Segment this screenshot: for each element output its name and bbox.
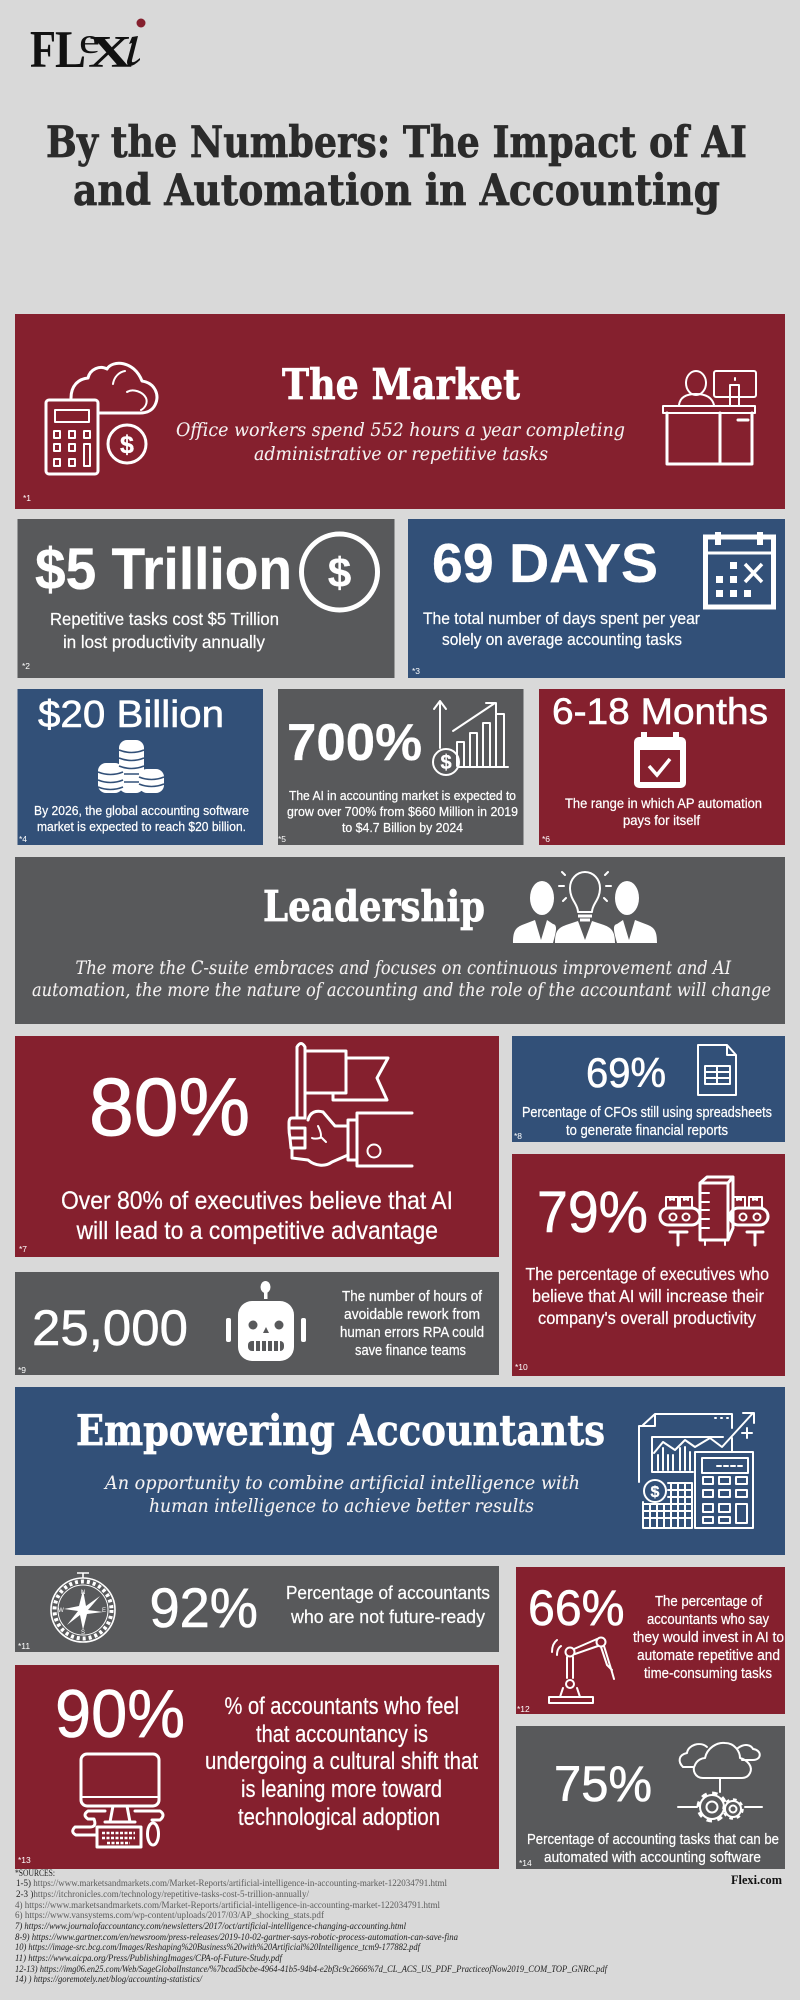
logo: Flexi [30,18,146,79]
description: automate repetitive and [637,1648,780,1664]
icon: production line [660,1177,768,1245]
panel: 90% [15,1665,499,1869]
heading: Empowering Accountants [76,1406,605,1455]
description [287,789,518,835]
sources list: 14) ) https://goremotely.net/blog/accounting-statistics/ [15,1974,203,1985]
description: The range in which AP automation [565,796,762,811]
logo: Flexi: e [79,21,100,61]
subtitle: human intelligence to achieve better results [149,1495,534,1517]
panel: 66% [516,1567,785,1714]
icon: calendar [705,532,774,607]
panel: the market [15,314,785,509]
icon: compass: E [102,1608,106,1614]
icon: compass: S [81,1630,85,1636]
sources list [15,1869,608,1985]
icon: desktop computer [73,1754,163,1847]
icon: report and calculator: $ [651,1484,660,1501]
description: The AI in accounting market is expected to [289,789,516,803]
sources list: 7) https://www.journalofaccountancy.com/newsletters/2017/oct/artificial-intelligence-changing-accounting.html [15,1921,406,1932]
description: accountants who say [647,1612,770,1628]
footnote: *2 [22,661,30,671]
description: company's overall productivity [538,1308,756,1328]
stat: 66% [528,1580,624,1636]
icon: compass [51,1573,115,1642]
footnote: *10 [515,1362,528,1372]
icon: fist holding flag [289,1044,412,1166]
description: pays for itself [623,813,700,828]
subtitle: administrative or repetitive tasks [254,443,548,465]
panel: 700% [278,689,524,845]
title [46,118,747,216]
description: to $4.7 Billion by 2024 [342,821,463,835]
sources list: 2-3 )https://itchronicles.com/technology/repetitive-tasks-cost-5-trillion-annually/ [16,1889,309,1900]
footnote: *11 [18,1641,30,1651]
sources list: 6) https://www.vansystems.com/wp-content/uploads/2017/03/AP_shocking_stats.pdf [15,1910,325,1921]
subtitle: An opportunity to combine artificial intelligence with [103,1472,580,1494]
icon: growth chart: $ [440,752,452,774]
description: avoidable rework from [344,1307,480,1323]
footnote: *8 [514,1131,522,1141]
heading: The Market [282,360,521,409]
description [340,1289,484,1359]
stat: 92% [150,1576,258,1639]
description: Percentage of accountants [286,1583,490,1603]
footnote: *14 [519,1858,532,1868]
icon: spreadsheet [698,1045,736,1095]
icon: three leaders and bulb [513,872,657,943]
footnote: *6 [542,834,550,844]
subtitle [103,1472,580,1517]
description: Over 80% of executives believe that AI [61,1187,453,1215]
description: save finance teams [355,1343,466,1359]
subtitle: Office workers spend 552 hours a year completing [176,419,625,441]
description: The percentage of executives who [526,1264,769,1284]
panel: leadership [15,857,785,1024]
description [423,609,700,649]
footnote: *13 [18,1855,31,1865]
description: undergoing a cultural shift that [205,1748,478,1775]
footnote: *12 [517,1704,530,1714]
footnote: *9 [18,1365,26,1375]
description: Percentage of accounting tasks that can be [527,1832,779,1848]
description: is leaning more toward [241,1776,442,1803]
footnote: *5 [278,834,286,844]
stat: 80% [89,1062,250,1153]
description: will lead to a competitive advantage [76,1217,438,1245]
description [565,796,762,828]
footnote: *7 [19,1244,27,1254]
icon: robot arm [549,1638,614,1703]
icon: dollar circle [302,534,378,610]
panel: 6-18 months [539,689,785,845]
panel: 75% [516,1726,785,1869]
panel: empowering accountants [15,1387,785,1555]
description [527,1832,779,1866]
sources list: *SOURCES: [15,1869,55,1879]
description: market is expected to reach $20 billion. [37,820,246,834]
description [522,1105,772,1139]
description: to generate financial reports [566,1123,728,1139]
stat: 25,000 [32,1300,188,1356]
icon: calculator, cloud and coin [46,363,157,474]
panel: 79% [512,1154,785,1376]
sources list: 11) https://www.aicpa.org/Press/PublishingImages/CPA-of-Future-Study.pdf [15,1953,283,1964]
panel: $20 billion [18,689,263,845]
panel: 92% [15,1566,499,1652]
icon: report and calculator [639,1413,754,1528]
stat: 700% [287,714,422,772]
stat: 6-18 Months [552,691,768,732]
description: % of accountants who feel [224,1693,459,1720]
description: technological adoption [238,1804,440,1831]
heading: Leadership [263,882,485,931]
description: believe that AI will increase their [532,1286,764,1306]
description: The total number of days spent per year [423,609,700,628]
website credit: Flexi.com [731,1872,782,1887]
description: who are not future-ready [290,1607,485,1627]
stat: 69% [586,1049,666,1096]
sources list: 10) https://image-src.bcg.com/Images/Reshaping%20Business%20with%20Artificial%20Intelligence_tcm9-177882.pdf [15,1942,421,1953]
icon: compass: W [58,1608,64,1614]
footnote: *4 [19,834,27,844]
description: they would invest in AI to [633,1630,784,1646]
description [32,957,771,1001]
description [205,1693,478,1831]
stat: 90% [55,1676,185,1752]
description [50,609,279,652]
description: time-consuming tasks [644,1666,772,1682]
footnote: *1 [23,493,31,503]
description [286,1583,490,1627]
description: The percentage of [655,1594,763,1610]
stat: $5 Trillion [35,537,292,602]
panel: 25,000 [15,1272,499,1375]
logo: Flexi: F [30,21,56,79]
panel: 69% [512,1036,785,1142]
description: human errors RPA could [340,1325,484,1341]
description [34,804,249,834]
icon: growth chart [433,701,508,775]
sources list: 8-9) https://www.gartner.com/en/newsroom/press-releases/2019-10-02-gartner-says-robotic-process-automation-can-save-fina [15,1932,458,1943]
icon: calculator, cloud and coin: $ [120,431,134,459]
sources list: 4) https://www.marketsandmarkets.com/Market-Reports/artificial-intelligence-in-accounting-market-122034791.html [15,1900,440,1911]
sources list: 1-5) https://www.marketsandmarkets.com/Market-Reports/artificial-intelligence-in-accounting-market-122034791.html [16,1878,447,1889]
description: Repetitive tasks cost $5 Trillion [50,609,279,629]
footnote: *3 [412,666,420,676]
logo: Flexi: L [55,21,86,79]
description: grow over 700% from $660 Million in 2019 [287,805,518,819]
panel: 69 days [408,519,785,678]
title: and Automation in Accounting [73,166,720,216]
icon: robot [226,1281,306,1361]
description: solely on average accounting tasks [442,630,682,649]
icon: compass: N [81,1590,85,1596]
description: that accountancy is [256,1721,428,1748]
sources list: 12-13) https://img06.en25.com/Web/SageGlobalInstance/%7bcad5bcbe-4964-41b5-94b4-e2bf3c9c2666%7d_CL_ACS_US_PDF_PracticeofNow2019_COM_TOP_GNRC.pdf [15,1964,608,1975]
stat: $20 Billion [38,694,224,736]
icon: coin stacks [98,740,164,793]
subtitle [176,419,625,465]
description: The number of hours of [342,1289,483,1305]
description: in lost productivity annually [63,632,265,652]
icon: cloud and gears [678,1743,762,1821]
stat: 79% [537,1180,648,1245]
icon: calendar check [634,732,686,788]
panel: $5 trillion [18,519,394,678]
stat: 75% [554,1756,652,1812]
description [633,1594,784,1682]
icon: dollar circle: $ [328,549,351,596]
description: By 2026, the global accounting software [34,804,249,818]
description: automated with accounting software [544,1850,761,1866]
stat: 69 DAYS [432,532,658,594]
panel: 80% [15,1036,499,1257]
description [61,1187,453,1245]
icon: person at desk [663,371,756,464]
description [526,1264,769,1328]
logo: Flexi: X [88,27,132,77]
